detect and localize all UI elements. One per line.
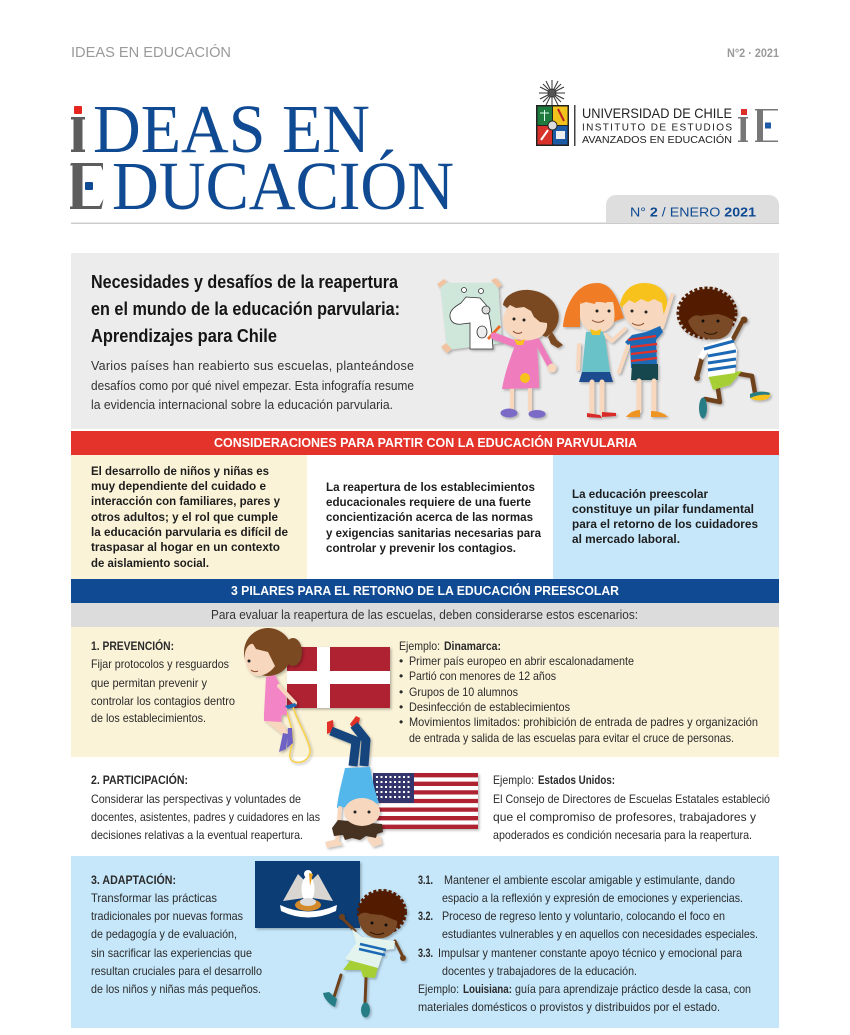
subheader band [71, 603, 779, 627]
illustration: dark-haired running boy [679, 289, 770, 418]
list of adaptation actions: Proceso de regreso lento y voluntario, colocando el foco en [442, 909, 725, 923]
logo text: UNIVERSIDAD DE CHILE [582, 105, 732, 121]
panel: consideration 1 [71, 455, 307, 579]
list of adaptation actions: espacio a la reflexión y expresión de emociones y experiencias. [442, 891, 743, 905]
list of adaptation actions: docentes y trabajadores de la educación. [442, 964, 637, 978]
list of adaptation actions: 3.2. [418, 909, 433, 923]
Estados Unidos example: Estados Unidos: [538, 773, 615, 787]
list of adaptation actions: 3.1. [418, 873, 433, 887]
icon: university shield [536, 105, 569, 146]
header band: considerations [71, 431, 779, 455]
masthead title [70, 91, 454, 224]
list of adaptation actions [418, 873, 758, 1014]
prevention text: que permitan prevenir y [91, 676, 207, 690]
Denmark example: • [399, 700, 403, 714]
flag: Denmark [287, 647, 390, 708]
panel: consideration 1: muy dependiente del cuidado e [91, 479, 266, 493]
Denmark example: Movimientos limitados: prohibición de entrada de padres y organización [409, 715, 758, 729]
panel: introduction [71, 253, 779, 429]
prevention text: 1. PREVENCIÓN: [91, 638, 174, 653]
list of adaptation actions: Mantener el ambiente escolar amigable y estimulante, dando [444, 873, 735, 887]
panel: consideration 1: traspasar al hogar en un contexto [91, 540, 280, 554]
icon: star emblem [539, 80, 565, 106]
prevention text: Fijar protocolos y resguardos [91, 657, 229, 671]
Denmark example: Primer país europeo en abrir escalonadamente [409, 654, 634, 668]
header band: three pillars [71, 579, 779, 603]
illustration: girl with pink dress [494, 290, 563, 418]
Estados Unidos example: El Consejo de Directores de Escuelas Estatales estableció [493, 792, 770, 806]
prevention text [91, 638, 235, 725]
panel: participation [91, 772, 770, 842]
list of adaptation actions: 3.3. [418, 946, 433, 960]
adaptation text: resultan cruciales para el desarrollo [91, 964, 262, 978]
panel: consideration 2: concientización acerca de las normas [326, 510, 533, 524]
participation text [91, 772, 320, 842]
illustration: giraffe drawing on paper [437, 278, 502, 353]
panel: consideration 2: y exigencias sanitarias necesarias para [326, 526, 541, 540]
university logo [536, 80, 778, 146]
prevention text: de los establecimientos. [91, 711, 206, 725]
list of adaptation actions: materiales domésticos o provistos y distribuidos por el estado. [418, 1000, 720, 1014]
participation text: Considerar las perspectivas y voluntades de [91, 792, 301, 806]
subheader band: Para evaluar la reapertura de las escuelas, deben considerarse estos escenarios: [211, 608, 638, 622]
logo text: INSTITUTO DE ESTUDIOS [582, 122, 732, 134]
panel: consideration 1: de aislamiento social. [91, 556, 209, 570]
intro text: la evidencia internacional sobre la educación parvularia. [91, 398, 393, 412]
intro text: Varios países han reabierto sus escuelas, planteándose [91, 359, 414, 373]
intro heading: en el mundo de la educación parvularia: [91, 299, 400, 319]
Denmark example: Ejemplo: [399, 639, 440, 653]
list of adaptation actions: Ejemplo: [418, 982, 459, 996]
list of adaptation actions: guía para aprendizaje práctico desde la casa, con [515, 982, 751, 996]
illustration: girl with orange hair [563, 283, 625, 418]
panel: consideration 1: otros adultos; y el rol que cumple [91, 510, 278, 524]
panel: consideration 3: constituye un pilar fundamental [572, 502, 754, 516]
participation text: decisiones relativas a la eventual reapertura. [91, 828, 303, 842]
adaptation text: 3. ADAPTACIÓN: [91, 872, 176, 887]
adaptation text: de los niños y niñas más pequeños. [91, 982, 261, 996]
Denmark example: • [399, 715, 403, 729]
panel: consideration 3: La educación preescolar [572, 487, 708, 501]
intro heading [91, 272, 400, 346]
adaptation text: Transformar las prácticas [91, 891, 217, 905]
logo text: AVANZADOS EN EDUCACIÓN [582, 133, 732, 146]
Denmark example [399, 639, 758, 745]
flag: Louisiana [255, 861, 360, 928]
running header: issue number: N°2 · 2021 [727, 48, 780, 60]
adaptation text: de pedagogía y de evaluación, [91, 927, 237, 941]
panel: consideration 3: para el retorno de los cuidadores [572, 517, 758, 531]
adaptation text [91, 872, 262, 996]
masthead title: DUCACIÓN [112, 148, 454, 224]
logo text [582, 105, 732, 146]
issue tab: N° 2 / ENERO 2021 [630, 204, 756, 220]
icon: IE monogram [738, 109, 778, 142]
panel: consideration 1: interacción con familiares, pares y [91, 494, 280, 508]
panel: consideration 3: al mercado laboral. [572, 532, 680, 546]
list of adaptation actions: Louisiana: [463, 982, 512, 996]
panel: consideration 2: La reapertura de los establecimientos [326, 480, 535, 494]
Denmark example: • [399, 685, 403, 699]
adaptation text: tradicionales por nuevas formas [91, 909, 243, 923]
Denmark example: de entrada y salida de las escuelas para evitar el cruce de personas. [409, 731, 734, 745]
issue tab [606, 195, 779, 223]
intro heading: Necesidades y desafíos de la reapertura [91, 272, 399, 292]
intro text [91, 359, 414, 412]
panel: adaptation [71, 856, 779, 1028]
panel: consideration 1: la educación parvularia es difícil de [91, 525, 288, 539]
Denmark example: • [399, 654, 403, 668]
panel: consideration 2 [307, 455, 553, 579]
Denmark example: Dinamarca: [444, 639, 501, 653]
illustration: boy reaching toward flag [323, 891, 406, 1018]
panel: prevention [71, 627, 779, 757]
panel: consideration 3 [553, 455, 779, 579]
participation text: docentes, asistentes, padres y cuidadores en las [91, 810, 320, 824]
header band: considerations: CONSIDERACIONES PARA PARTIR CON LA EDUCACIÓN PARVULARIA [214, 435, 637, 450]
header band: three pillars: 3 PILARES PARA EL RETORNO DE LA EDUCACIÓN PREESCOLAR [231, 583, 619, 598]
Estados Unidos example [493, 773, 770, 842]
intro text: desafíos como por qué nivel empezar. Esta infografía resume [91, 379, 414, 393]
Denmark example: Desinfección de establecimientos [409, 700, 570, 714]
prevention text: controlar los contagios dentro [91, 694, 235, 708]
adaptation text: sin sacrificar las experiencias que [91, 946, 252, 960]
participation text: 2. PARTICIPACIÓN: [91, 772, 188, 787]
flag: United States [373, 773, 478, 829]
running header: publication name: IDEAS EN EDUCACIÓN [71, 44, 231, 61]
list of adaptation actions: Impulsar y mantener constante apoyo técnico y emocional para [438, 946, 742, 960]
masthead title: DEAS EN [93, 91, 370, 167]
Denmark example: Partió con menores de 12 años [409, 669, 556, 683]
illustration: girl jumping rope [244, 628, 310, 762]
panel: consideration 2: controlar y prevenir los contagios. [326, 541, 516, 555]
illustration: blond boy [619, 283, 672, 417]
panel: consideration 2: educacionales requiere de una fuerte [326, 495, 531, 509]
illustration: child doing a handstand [325, 716, 383, 848]
masthead rule [71, 222, 779, 224]
intro heading: Aprendizajes para Chile [91, 326, 277, 346]
Denmark example: • [399, 669, 403, 683]
Estados Unidos example: apoderados es condición necesaria para la reapertura. [493, 828, 752, 842]
Estados Unidos example: que el compromiso de profesores, trabajadores y [493, 810, 756, 824]
Denmark example: Grupos de 10 alumnos [409, 685, 518, 699]
Estados Unidos example: Ejemplo: [493, 773, 534, 787]
list of adaptation actions: estudiantes vulnerables y en aquellos con necesidades especiales. [442, 927, 758, 941]
panel: consideration 1: El desarrollo de niños y niñas es [91, 464, 269, 478]
